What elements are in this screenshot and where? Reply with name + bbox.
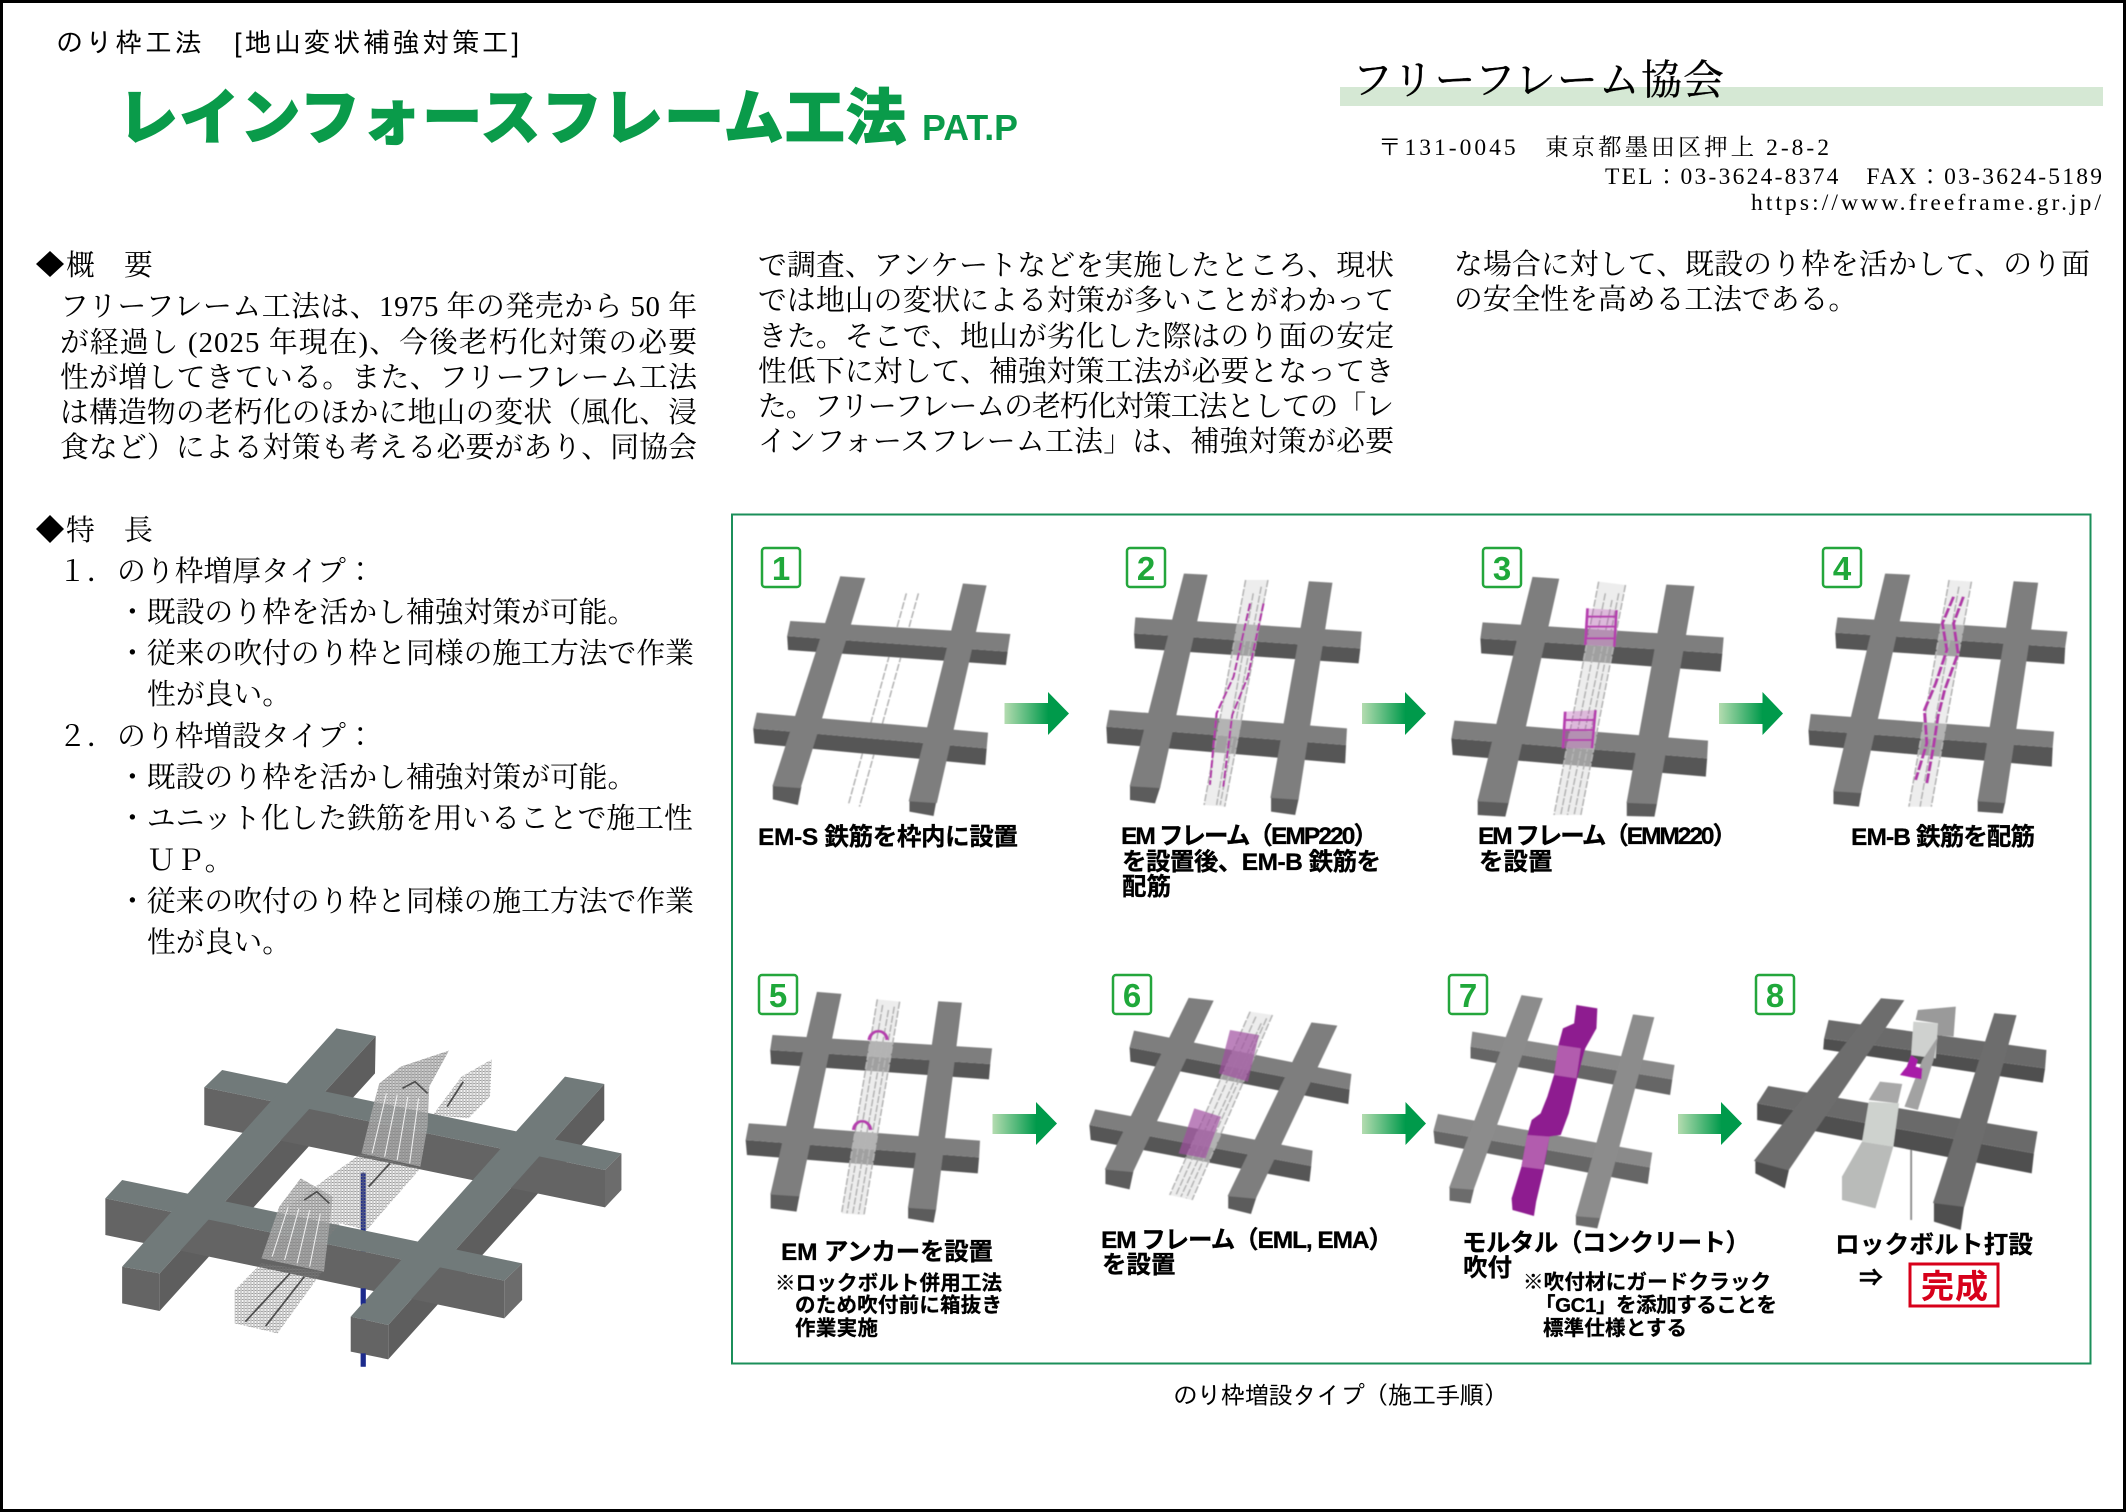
step 5 caption: 作業実施 <box>795 1317 878 1340</box>
features list: ・既設のり枠を活かし補強対策が可能。 <box>118 597 636 629</box>
step 6 illustration <box>1089 999 1351 1214</box>
step 6 caption: EM フレーム（EML, EMA） <box>1101 1226 1393 1254</box>
category line: のり枠工法 [地山変状補強対策工] <box>56 28 519 58</box>
step 7 caption: モルタル（コンクリート） <box>1462 1229 1750 1257</box>
step 7 number <box>1449 975 1487 1014</box>
features list: ＵＰ。 <box>147 845 233 877</box>
step 3 number: 3 <box>1493 550 1511 587</box>
step 3 number <box>1483 548 1521 587</box>
step 1 caption: EM-S 鉄筋を枠内に設置 <box>758 823 1018 851</box>
step 2 number: 2 <box>1137 550 1155 587</box>
features list: のり枠増設タイプ： <box>117 721 375 753</box>
overview text column 2: で調査、アンケートなどを実施したところ、現状 <box>758 250 1394 282</box>
overview text column 3: の安全性を高める工法である。 <box>1454 284 1857 316</box>
step 1 number <box>762 548 800 587</box>
step 2 caption <box>1121 822 1381 901</box>
step 5 caption: のため吹付前に箱抜き <box>795 1294 1002 1317</box>
step 8 number: 8 <box>1766 977 1784 1014</box>
features list: ２． <box>58 721 116 753</box>
features list: ・ユニット化した鉄筋を用いることで施工性 <box>118 803 693 835</box>
arrow 2 to 3 <box>1362 692 1426 735</box>
arrow 5 to 6 <box>992 1102 1057 1145</box>
overview text column 2: た。フリーフレームの老朽化対策工法としての「レ <box>758 391 1394 423</box>
features list: ・既設のり枠を活かし補強対策が可能。 <box>118 762 636 794</box>
features heading <box>36 515 153 547</box>
step 4 caption: EM-B 鉄筋を配筋 <box>1851 823 2035 851</box>
association header: フリーフレーム協会 <box>1352 57 1724 103</box>
step 1 illustration <box>753 578 1010 816</box>
step 4 number: 4 <box>1833 550 1852 587</box>
step 7 caption: ※吹付材にガードクラック <box>1523 1271 1771 1294</box>
overview text column 2: では地山の変状による対策が多いことがわかって <box>758 285 1394 317</box>
step 7 caption: 標準仕様とする <box>1543 1317 1687 1340</box>
overview text column 2: インフォースフレーム工法」は、補強対策が必要 <box>758 426 1394 458</box>
step 8 caption: ロックボルト打設 <box>1835 1231 2033 1259</box>
step 7 number: 7 <box>1459 977 1477 1014</box>
features list: 性が良い。 <box>147 927 291 959</box>
step 8 number <box>1756 975 1794 1014</box>
step 6 caption <box>1101 1226 1393 1279</box>
step 8 illustration <box>1755 1000 2046 1230</box>
step 5 number: 5 <box>769 977 787 1014</box>
step 5 caption <box>775 1239 1002 1340</box>
step 5 illustration <box>746 993 992 1223</box>
step 3 caption: EM フレーム（EMM220） <box>1478 822 1737 850</box>
overview text column 1: 食など）による対策も考える必要があり、同協会 <box>60 432 697 464</box>
step 7 caption <box>1462 1229 1777 1340</box>
completed badge: 完成 <box>1921 1268 1988 1305</box>
features heading: 特 <box>66 515 95 547</box>
completed arrow symbol: ⇒ <box>1859 1265 1883 1292</box>
overview heading: 要 <box>124 250 153 282</box>
step 2 number <box>1127 548 1165 587</box>
contact information: TEL：03-3624-8374 FAX：03-3624-5189 <box>1605 164 2102 190</box>
step 4 number <box>1823 548 1861 587</box>
step 2 caption: EM フレーム（EMP220） <box>1121 822 1378 850</box>
overview text column 1: は構造物の老朽化のほかに地山の変状（風化、浸 <box>60 397 697 429</box>
overview heading: 概 <box>66 250 95 282</box>
overview text column 3: な場合に対して、既設のり枠を活かして、のり面 <box>1454 249 2090 281</box>
overview text column 2 <box>758 250 1394 458</box>
features list: 性が良い。 <box>147 679 291 711</box>
panel: construction procedure <box>732 514 2090 1364</box>
step 2 caption: 配筋 <box>1122 873 1171 901</box>
step 3 illustration <box>1451 578 1724 817</box>
contact information <box>1378 134 2102 216</box>
step 7 caption: 「GC1」を添加することを <box>1535 1294 1777 1317</box>
arrow 6 to 7 <box>1362 1102 1426 1145</box>
step 1 number: 1 <box>772 550 790 587</box>
overview text column 1: 性が増してきている。また、フリーフレーム工法 <box>60 362 698 394</box>
overview text column 1: が経過し (2025 年現在)、今後老朽化対策の必要 <box>60 327 697 359</box>
step 6 number: 6 <box>1123 977 1141 1014</box>
features list: のり枠増厚タイプ： <box>117 556 375 588</box>
arrow 1 to 2 <box>1004 692 1069 735</box>
arrow 3 to 4 <box>1719 692 1783 735</box>
features list: １． <box>58 556 116 588</box>
overview text column 2: きた。そこで、地山が劣化した際はのり面の安定 <box>758 321 1394 353</box>
overview text column 1 <box>60 291 698 464</box>
title: レインフォースフレーム工法 <box>118 85 906 152</box>
features list <box>58 556 694 959</box>
contact information: https://www.freeframe.gr.jp/ <box>1751 190 2101 216</box>
arrow 7 to 8 <box>1678 1102 1742 1145</box>
association header <box>1340 57 2103 106</box>
contact information: 〒131-0045 東京都墨田区押上 2-8-2 <box>1378 134 1829 161</box>
completed badge <box>1910 1264 1998 1306</box>
step 4 illustration <box>1808 575 2067 813</box>
step 7 illustration <box>1433 997 1675 1228</box>
step 3 caption: を設置 <box>1479 849 1552 876</box>
step 6 caption: を設置 <box>1102 1252 1176 1279</box>
step 5 caption: ※ロックボルト併用工法 <box>775 1272 1002 1295</box>
step 5 caption: EM アンカーを設置 <box>781 1239 993 1266</box>
overview text column 2: 性低下に対して、補強対策工法が必要となってき <box>758 356 1394 388</box>
step 6 number <box>1113 975 1151 1014</box>
overview heading <box>36 250 153 282</box>
features list: ・従来の吹付のり枠と同様の施工方法で作業 <box>118 886 694 918</box>
step 7 caption: 吹付 <box>1463 1254 1512 1282</box>
panel caption: のり枠増設タイプ（施工手順） <box>1173 1382 1508 1410</box>
overview text column 3 <box>1454 249 2090 316</box>
step 2 illustration <box>1106 575 1362 815</box>
title: PAT.P <box>922 107 1018 148</box>
overview text column 1: フリーフレーム工法は、1975 年の発売から 50 年 <box>60 291 697 323</box>
step 2 caption: を設置後、EM-B 鉄筋を <box>1122 848 1381 876</box>
illustration: reinforced frame 3D view <box>105 1028 621 1367</box>
step 3 caption <box>1478 822 1737 876</box>
features heading: 長 <box>124 515 153 547</box>
step 5 number <box>759 975 797 1014</box>
features list: ・従来の吹付のり枠と同様の施工方法で作業 <box>118 638 694 670</box>
